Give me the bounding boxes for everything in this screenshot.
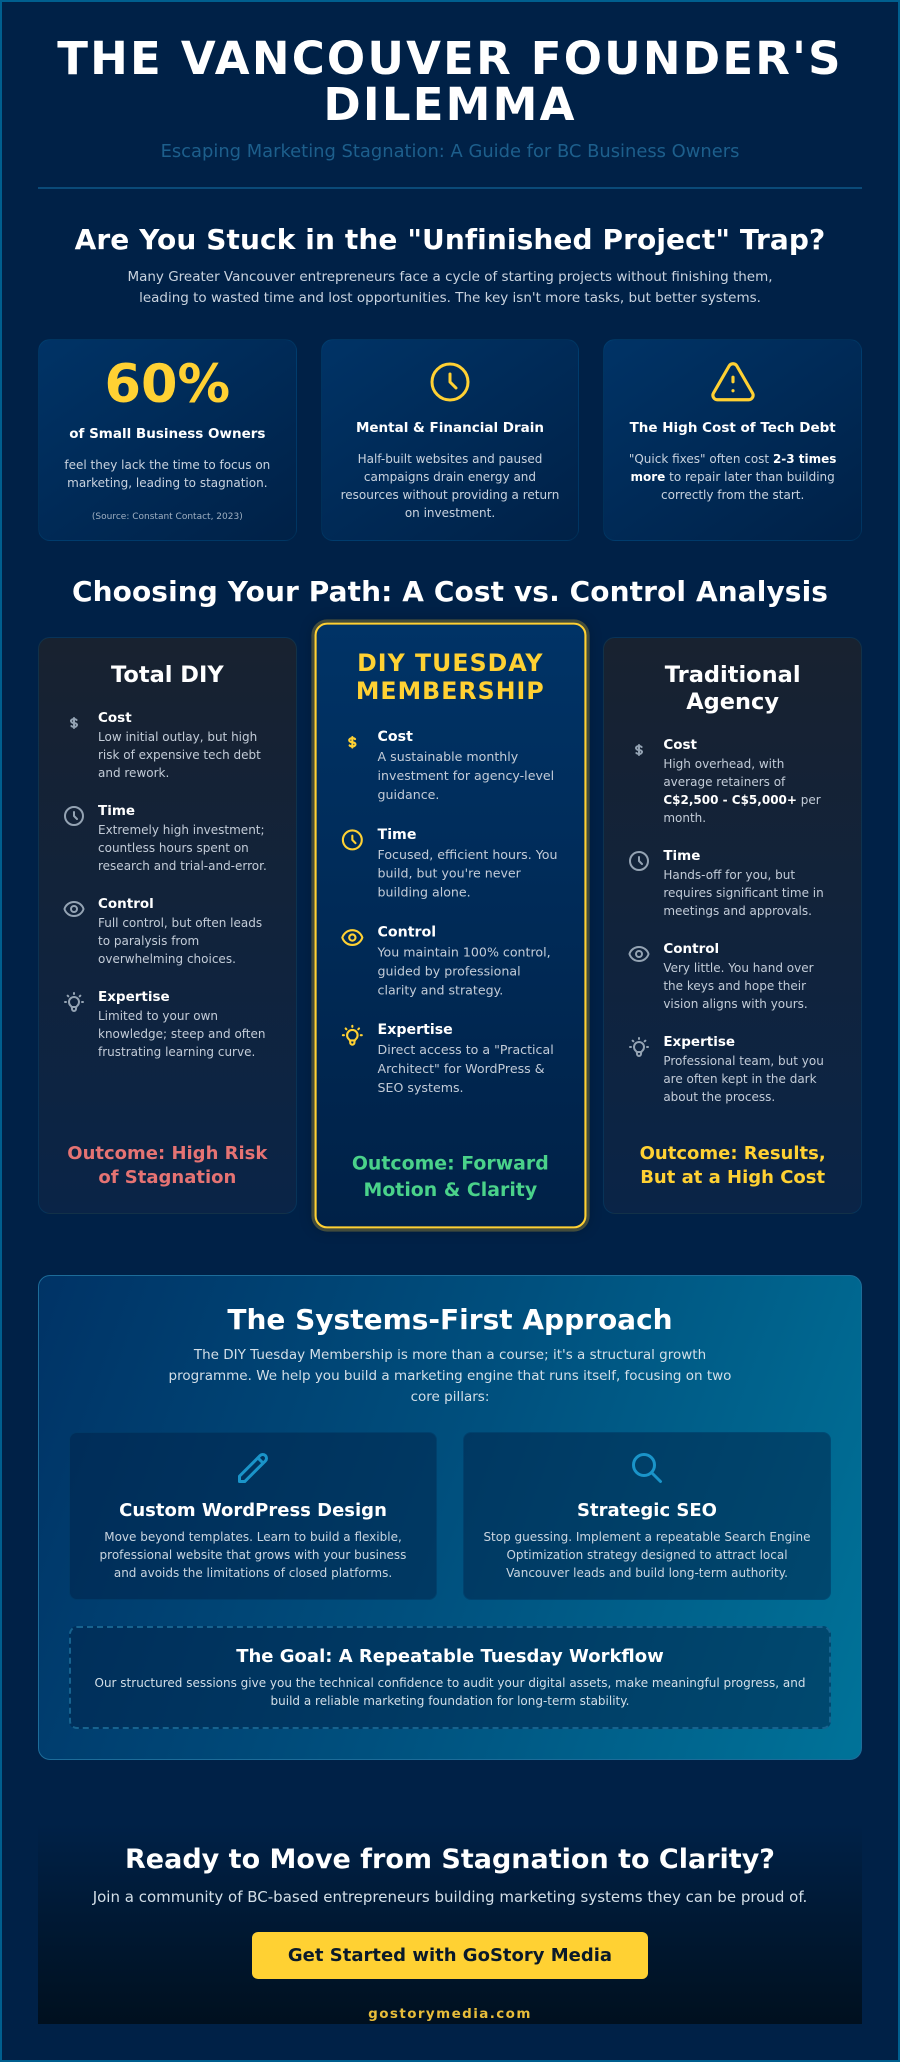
- source note: (Source: Constant Contact, 2023): [92, 512, 243, 522]
- outcome: Outcome: Forward Motion & Clarity: [352, 1153, 548, 1201]
- row: expertise: [629, 1034, 824, 1104]
- CTA heading: Ready to Move from Stagnation to Clarity?: [125, 1844, 775, 1875]
- row: expertise: [342, 1021, 553, 1095]
- CTA paragraph: Join a community of BC-based entrepreneurs building marketing systems they can be proud of.: [93, 1888, 807, 1906]
- CTA button: Get Started with GoStory Media: [288, 1945, 612, 1966]
- statistic number: 60%: [104, 354, 230, 415]
- panel: DIY Tuesday membership: [314, 623, 586, 1228]
- row: control: You maintain 100% control, guided by professional clarity and strategy.: [377, 945, 550, 997]
- row: expertise: Professional team, but you are often kept in the dark about the process.: [663, 1054, 824, 1104]
- row: time: Time: [377, 826, 416, 843]
- row: control: [341, 923, 550, 997]
- icon: clock: [430, 362, 470, 402]
- row: control: Control: [663, 941, 719, 957]
- pillar: strategic SEO: [463, 1432, 831, 1600]
- systems intro paragraph: The DIY Tuesday Membership is more than a course; it's a structural growth programme. We help you build a marketing engine that runs itself, focusing on two core pillars:: [169, 1346, 731, 1404]
- panel: cost of tech debt: [603, 339, 862, 541]
- column heading: Total DIY: [111, 662, 224, 688]
- title: THE VANCOUVER FOUNDER'S: [57, 32, 843, 85]
- pillar: custom wordpress design: [69, 1432, 437, 1600]
- row: expertise: Expertise: [663, 1034, 735, 1050]
- column heading: Traditional Agency: [665, 662, 801, 715]
- panel: traditional agency: [603, 637, 862, 1214]
- heading: systems-first approach: The Systems-First Approach: [227, 1303, 673, 1336]
- callout heading: The Goal: A Repeatable Tuesday Workflow: [236, 1646, 664, 1667]
- row: expertise: Expertise: [98, 989, 170, 1005]
- row: control: [628, 941, 814, 1011]
- row: time: Focused, efficient hours. You build, but you're never building alone.: [377, 847, 557, 900]
- intro paragraph: leading to wasted time and lost opportunities. The key isn't more tasks, but better systems.: [139, 290, 761, 306]
- row: cost: [70, 710, 261, 780]
- card description: Half-built websites and paused campaigns drain energy and resources without providing a return on investment.: [341, 452, 559, 520]
- card heading: Mental & Financial Drain: [356, 420, 544, 436]
- statistic label: of Small Business Owners: [69, 426, 265, 442]
- pillar heading: Custom WordPress Design: [119, 1500, 387, 1521]
- title: [57, 32, 843, 131]
- row: time: [64, 803, 267, 873]
- panel: call to action: [38, 1824, 862, 2024]
- row: control: Control: [377, 923, 436, 940]
- row: cost: Cost: [377, 728, 413, 745]
- row: expertise: Expertise: [377, 1021, 452, 1038]
- card heading: The High Cost of Tech Debt: [630, 420, 836, 436]
- row: control: [64, 896, 262, 966]
- row: cost: Cost: [663, 737, 697, 753]
- heading: choosing your path: Choosing Your Path: A Cost vs. Control Analysis: [72, 575, 828, 608]
- panel: systems-first approach: [38, 1275, 862, 1760]
- row: control: Control: [98, 896, 154, 912]
- row: control: Very little. You hand over the keys and hope their vision aligns with yours.: [663, 961, 814, 1011]
- panel: mental and financial drain: [321, 339, 579, 541]
- panel: 60% statistic: [38, 339, 297, 541]
- row: time: Extremely high investment; countless hours spent on research and trial-and-error.: [98, 823, 267, 873]
- heading: unfinished project trap: Are You Stuck in the "Unfinished Project" Trap?: [75, 223, 825, 256]
- row: time: [342, 826, 557, 900]
- row: expertise: Limited to your own knowledge; steep and often frustrating learning curve.: [98, 1009, 266, 1059]
- pillar description: Stop guessing. Implement a repeatable Search Engine Optimization strategy designed to attract local Vancouver leads and build long-term authority.: [483, 1530, 811, 1580]
- row: cost: [348, 728, 554, 802]
- icon: pencil: [238, 1453, 268, 1483]
- subtitle: Escaping Marketing Stagnation: A Guide for BC Business Owners: [161, 141, 739, 162]
- statistic description: feel they lack the time to focus on marketing, leading to stagnation.: [64, 458, 270, 490]
- row: time: [629, 848, 824, 918]
- outcome: Outcome: Results, But at a High Cost: [640, 1143, 826, 1188]
- icon: magnifier: [632, 1453, 662, 1483]
- row: expertise: [64, 989, 266, 1059]
- row: cost: [635, 737, 821, 825]
- callout text: Our structured sessions give you the technical confidence to audit your digital assets, make meaningful progress, and build a reliable marketing foundation for long-term stability.: [94, 1676, 806, 1708]
- row: cost: Cost: [98, 710, 132, 726]
- CTA button: [252, 1932, 648, 1979]
- title: DILEMMA: [323, 78, 577, 131]
- intro paragraph: [127, 269, 773, 306]
- row: cost: Low initial outlay, but high risk of expensive tech debt and rework.: [98, 730, 261, 780]
- icon: warning triangle: [711, 362, 755, 402]
- callout: the goal: [69, 1626, 831, 1729]
- website link: gostorymedia.com: [368, 2006, 532, 2022]
- intro paragraph: Many Greater Vancouver entrepreneurs face a cycle of starting projects without finishing them,: [127, 269, 773, 285]
- panel: total DIY: [38, 637, 297, 1214]
- row: cost: A sustainable monthly investment for agency-level guidance.: [377, 749, 554, 802]
- row: time: Hands-off for you, but requires significant time in meetings and approvals.: [663, 868, 824, 918]
- row: cost: High overhead, with average retainers of C$2,500 - C$5,000+ per month.: [663, 757, 821, 825]
- row: control: Full control, but often leads to paralysis from overwhelming choices.: [98, 916, 262, 966]
- pillar heading: Strategic SEO: [577, 1500, 717, 1521]
- row: time: Time: [663, 848, 700, 864]
- row: time: Time: [98, 803, 135, 819]
- column heading: DIY TUESDAY MEMBERSHIP: [356, 650, 544, 706]
- pillar description: Move beyond templates. Learn to build a flexible, professional website that grows with your business and avoids the limitations of closed platforms.: [100, 1530, 406, 1580]
- row: expertise: Direct access to a "Practical Architect" for WordPress & SEO systems.: [377, 1042, 553, 1095]
- outcome: Outcome: High Risk of Stagnation: [67, 1143, 267, 1188]
- card description: "Quick fixes" often cost 2-3 times more to repair later than building correctly from the start.: [629, 452, 836, 502]
